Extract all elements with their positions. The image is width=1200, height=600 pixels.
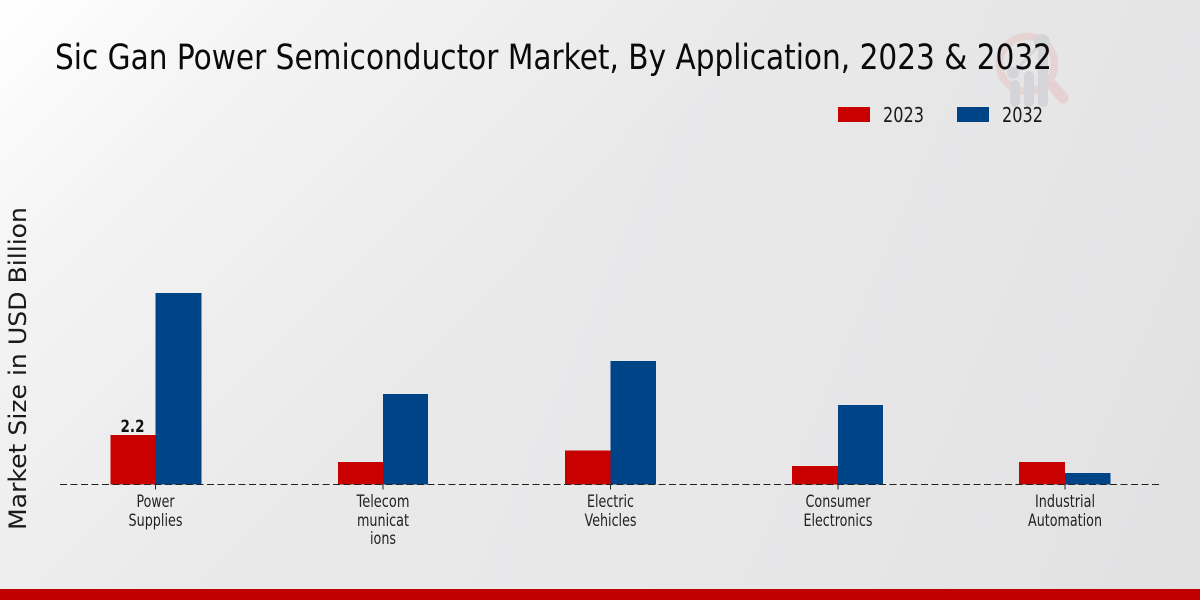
label: Consumer Electronics: Consumer <box>806 492 871 511</box>
label: Telecommunications: municat <box>357 511 409 530</box>
label: Telecommunications: Telecom <box>356 492 410 511</box>
legend item: 2032: 2032 <box>1002 103 1043 127</box>
label: Consumer Electronics: Electronics <box>804 511 872 530</box>
data label: 2.2: 2.2 <box>120 417 144 436</box>
legend item: 2023 <box>838 103 924 127</box>
label: Telecommunications <box>356 492 410 548</box>
group: Telecommunications <box>338 394 428 484</box>
group: Electric Vehicles <box>565 361 656 484</box>
label: Industrial Automation <box>1028 492 1102 530</box>
bar chart <box>110 293 1110 484</box>
legend item: 2023: 2023 <box>883 103 924 127</box>
label: Electric Vehicles: Vehicles <box>584 511 636 530</box>
label: Consumer Electronics <box>804 492 872 530</box>
label: Industrial Automation: Industrial <box>1035 492 1095 511</box>
label: Industrial Automation: Automation <box>1028 511 1102 530</box>
label: Power Supplies <box>128 492 182 530</box>
legend <box>838 103 1043 127</box>
label: Telecommunications: ions <box>370 529 396 548</box>
label: Electric Vehicles: Electric <box>587 492 634 511</box>
label: Electric Vehicles <box>584 492 636 530</box>
label: Power Supplies: Power <box>136 492 175 511</box>
footer bar <box>0 589 1200 600</box>
group: Industrial Automation <box>1019 462 1110 484</box>
legend item: 2032 <box>957 103 1043 127</box>
title: Sic Gan Power Semiconductor Market, By Application, 2023 & 2032 <box>55 38 1052 78</box>
icon: watermark magnifier logo <box>1000 34 1063 107</box>
y-axis label: Market Size in USD Billion <box>4 207 32 530</box>
group: Consumer Electronics <box>792 405 883 484</box>
group: Power Supplies <box>110 293 202 484</box>
label: Power Supplies: Supplies <box>128 511 182 530</box>
x-axis baseline <box>60 484 1160 490</box>
x-axis labels <box>128 492 1102 548</box>
